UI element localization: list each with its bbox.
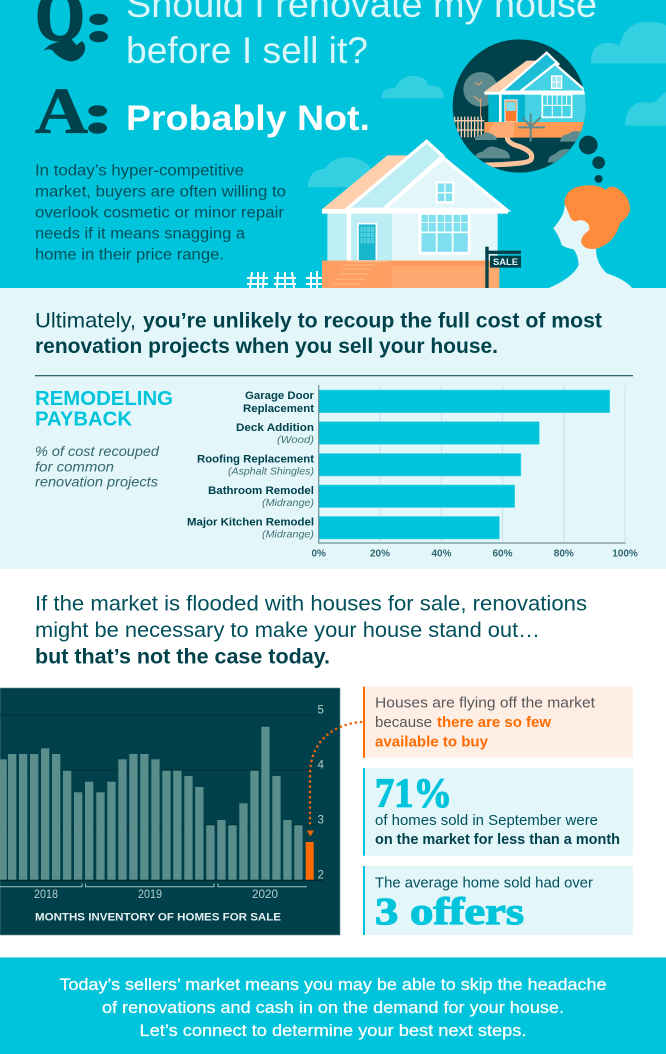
chart heading: PAYBACK <box>35 408 132 430</box>
panel: inventory chart <box>0 688 340 935</box>
x axis labels: 40% <box>431 549 452 560</box>
category labels: (Midrange) <box>262 528 314 540</box>
panel: footer call to action: Today’s sellers’ market means you may be able to skip the headache <box>60 976 606 994</box>
year labels: 2018 <box>34 889 58 901</box>
chart description <box>35 444 160 490</box>
y axis labels: 4 <box>317 760 324 772</box>
x axis labels: 100% <box>612 549 638 560</box>
intro paragraph: home in their price range. <box>35 246 224 264</box>
category labels: Roofing Replacement <box>197 454 314 466</box>
chart description: % of cost recouped <box>35 444 160 459</box>
year brackets <box>0 884 307 887</box>
category labels: Replacement <box>243 403 314 415</box>
background clouds <box>308 22 666 187</box>
category labels: Deck Addition <box>236 422 314 434</box>
bars: months of inventory <box>0 727 303 880</box>
callout: few available: Houses are flying off the market <box>375 695 595 711</box>
category labels: (Wood) <box>277 434 314 446</box>
x axis labels: 60% <box>492 549 513 560</box>
intro paragraph <box>35 163 286 264</box>
x axis labels: 0% <box>311 549 326 560</box>
section statement: renovation projects when you sell your house. <box>35 335 498 358</box>
icon: picket fence <box>247 271 323 288</box>
x axis labels: 80% <box>554 549 574 560</box>
callout: 71 percent: on the market for less than a month <box>375 832 620 848</box>
chart heading: REMODELING <box>35 387 173 410</box>
category labels: (Midrange) <box>262 497 314 509</box>
callout: 3 offers: 3 offers <box>375 891 524 933</box>
intro paragraph: In today’s hyper-competitive <box>35 163 244 180</box>
A mark: : <box>83 84 113 144</box>
category labels: Garage Door <box>245 390 315 402</box>
callout: 71 percent: of homes sold in September were <box>375 813 598 829</box>
x axis labels: 20% <box>370 549 390 560</box>
panel: remodeling payback <box>0 288 666 569</box>
text block: market statement <box>35 593 587 668</box>
callout: 71 percent: 71% <box>375 770 452 816</box>
chart title: MONTHS INVENTORY OF HOMES FOR SALE <box>35 912 281 924</box>
illustration: house for sale <box>322 141 508 289</box>
text block: market statement: but that’s not the case today. <box>35 646 330 668</box>
sale sign: SALE <box>493 257 518 267</box>
category labels: (Asphalt Shingles) <box>228 466 314 478</box>
question heading <box>126 0 597 71</box>
intro paragraph: needs if it means snagging a <box>35 226 245 242</box>
callout: 3 offers: The average home sold had over <box>375 875 593 891</box>
arrow: dotted callout connector <box>307 722 361 836</box>
question heading: before I sell it? <box>126 30 368 71</box>
chart description: renovation projects <box>35 475 158 490</box>
year labels: 2020 <box>252 889 278 901</box>
category labels: Bathroom Remodel <box>208 485 314 497</box>
chart description: for common <box>35 460 114 474</box>
category labels: Major Kitchen Remodel <box>187 516 314 528</box>
A mark <box>35 75 113 148</box>
illustration: woman silhouette <box>548 185 632 288</box>
section statement: Ultimately, <box>35 310 136 332</box>
text block: market statement: might be necessary to make your house stand out… <box>35 619 540 642</box>
x axis labels <box>311 549 638 560</box>
callout: 71 percent <box>363 768 633 856</box>
y axis labels <box>317 704 324 882</box>
callout: few available: because <box>375 715 432 731</box>
panel: footer call to action: of renovations and cash in on the demand for your house. <box>102 999 564 1017</box>
sale sign <box>485 247 521 289</box>
y axis labels: 2 <box>317 870 324 882</box>
A mark: A <box>35 75 88 148</box>
intro paragraph: market, buyers are often willing to <box>35 184 286 201</box>
callout: 3 offers <box>363 866 633 935</box>
bars <box>319 390 610 539</box>
text block: market statement: If the market is flooded with houses for sale, renovations <box>35 593 587 616</box>
category labels <box>187 390 315 540</box>
y axis labels: 3 <box>317 814 324 826</box>
intro paragraph: overlook cosmetic or minor repair <box>35 204 284 222</box>
callout: few available <box>363 687 633 758</box>
year labels <box>34 889 278 901</box>
chart heading <box>35 387 173 430</box>
answer heading: Probably Not. <box>126 99 370 138</box>
bar chart: payback <box>187 385 638 560</box>
callout: few available: there are so few <box>437 715 552 731</box>
highlighted current bar <box>306 842 314 880</box>
illustration: dream house bubble <box>453 39 588 173</box>
year labels: 2019 <box>138 889 162 901</box>
panel: header <box>0 0 666 289</box>
icon: thought bubbles <box>579 136 605 183</box>
section statement <box>35 310 602 358</box>
y axis labels: 5 <box>317 704 324 716</box>
panel: footer call to action <box>0 958 666 1054</box>
Q mark <box>36 0 114 61</box>
section statement: you’re unlikely to recoup the full cost of most <box>143 310 602 332</box>
panel: footer call to action: Let’s connect to determine your best next steps. <box>140 1022 526 1040</box>
callout: few available: available to buy <box>375 734 488 750</box>
